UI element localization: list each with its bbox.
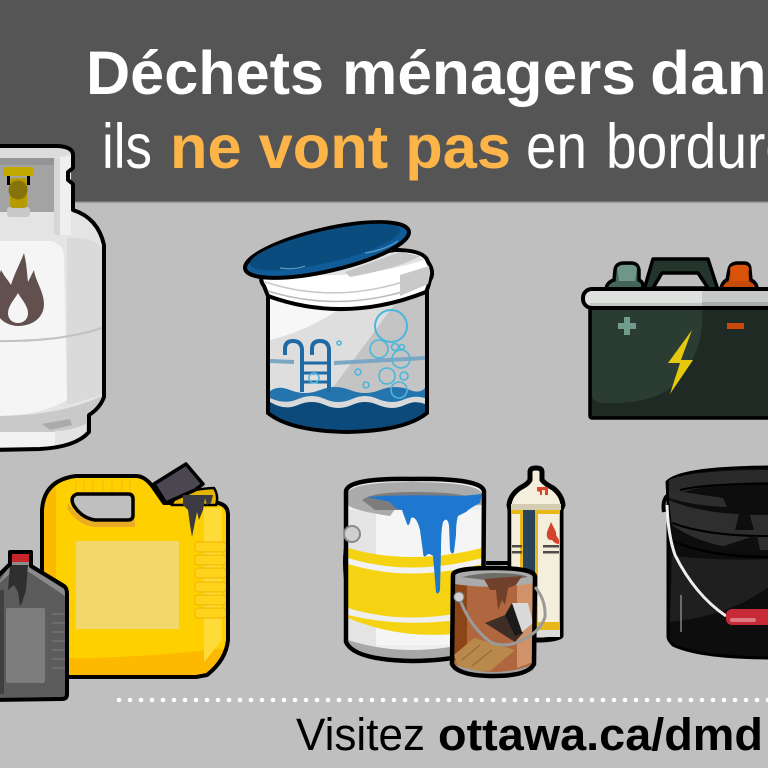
battery handle (644, 259, 718, 290)
lug (344, 526, 360, 542)
bucket lid (240, 211, 414, 289)
icon: flame (0, 253, 44, 326)
title (86, 39, 768, 182)
footer call to action: Visitez (296, 709, 425, 760)
dotted divider (119, 698, 768, 702)
icon: yellow fuel jug (40, 464, 230, 680)
jug handle opening (72, 494, 133, 520)
bucket shading (268, 282, 370, 340)
lightning bolt (668, 330, 693, 394)
tank base (0, 396, 102, 448)
title line 2 (102, 112, 768, 182)
icon: pool chlorine bucket (240, 211, 432, 432)
red grip (726, 609, 768, 625)
bubbles (309, 310, 410, 398)
flame mark (547, 522, 559, 544)
icon: wood stain can (452, 568, 545, 676)
icon: motor oil bottle (0, 552, 67, 700)
gas valve (3, 167, 34, 217)
tank body label panel (0, 241, 67, 416)
icon: propane tank (0, 146, 104, 450)
title line 2: ils (102, 112, 152, 182)
yellow stripes (348, 548, 482, 635)
header band (0, 0, 768, 202)
wood plank (454, 638, 515, 671)
bucket body outline (268, 290, 427, 432)
small can outline (452, 568, 535, 676)
paint can handle lug (344, 540, 347, 590)
icon: spray can (486, 468, 563, 640)
top ridges (76, 479, 130, 492)
can wire handle (459, 587, 545, 645)
spilled oil cap (154, 464, 217, 537)
title line 2: en (526, 112, 587, 182)
paint streak (712, 505, 760, 550)
bucket gloss (670, 556, 768, 622)
grip ridges (195, 542, 226, 618)
oil grip ridges (52, 614, 66, 668)
paint brush (485, 603, 533, 642)
positive terminal (606, 263, 643, 289)
rim (454, 570, 534, 587)
oil bottle outline (0, 552, 67, 700)
water band (270, 387, 425, 431)
pool ladder (285, 341, 329, 392)
plus sign (618, 317, 636, 335)
jug handle shadow (67, 503, 135, 527)
negative terminal (721, 263, 757, 289)
battery case (590, 300, 768, 418)
can rim (347, 482, 482, 516)
jug outline (42, 476, 228, 677)
footer call to action: ottawa.ca/dmd (438, 709, 763, 760)
jug label (76, 541, 179, 629)
can bottom rim (453, 664, 534, 675)
spray can lines (512, 545, 559, 554)
spray can stripes (511, 510, 560, 630)
icon: black bucket (664, 467, 768, 658)
tank outline (0, 146, 104, 450)
rim bands (669, 470, 768, 498)
title line 1: Déchets (86, 39, 324, 107)
minus sign (727, 323, 744, 329)
battery lid (583, 289, 768, 308)
tank collar strap (54, 156, 71, 235)
title line 1: ménagers (342, 39, 636, 107)
red mark (537, 487, 548, 495)
bucket rims (261, 250, 432, 309)
footer call to action (296, 709, 763, 760)
icon: large paint can (344, 479, 484, 661)
icon: car battery (583, 259, 768, 418)
title line 1 (86, 39, 768, 107)
wire handle (667, 505, 726, 616)
tank seam (0, 328, 102, 341)
large can outline (346, 479, 484, 661)
title line 2: ne vont pas (170, 113, 511, 181)
waterline (270, 358, 425, 363)
oil label (6, 608, 45, 683)
blue paint drip (367, 494, 482, 594)
brown drip (484, 576, 522, 610)
